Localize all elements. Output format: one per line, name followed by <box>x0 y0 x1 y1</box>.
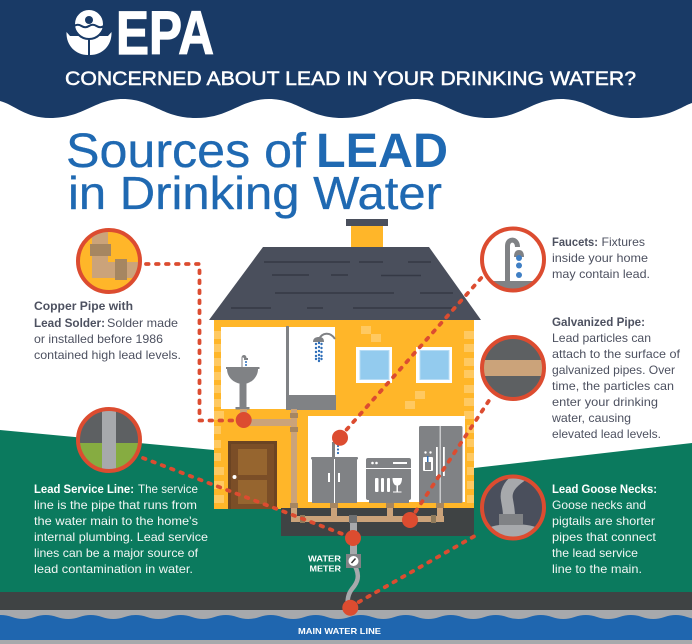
text: lead service line: lines can be a major source of <box>34 546 199 560</box>
underground street and water main <box>0 592 692 644</box>
roof <box>209 247 481 320</box>
kitchen faucet <box>332 442 339 458</box>
chimney <box>346 219 388 248</box>
water meter label: METER <box>310 564 341 574</box>
text: lead goose necks: pipes that connect <box>552 530 657 544</box>
text: lead goose necks: the lead service <box>552 546 638 560</box>
text: lead service line: internal plumbing. Lead service <box>34 530 208 544</box>
bathtub <box>286 395 336 410</box>
text: copper pipe: or installed before 1986 <box>34 332 163 346</box>
callout: copper pipe <box>34 228 181 362</box>
main water line <box>0 615 692 640</box>
windows <box>356 347 452 383</box>
indoor plumbing <box>240 409 444 523</box>
cabinet <box>311 457 358 503</box>
EPA wordmark: EPA <box>116 0 214 67</box>
title: LEAD <box>316 125 448 178</box>
shower <box>313 334 335 362</box>
text: copper pipe: Lead Solder: <box>34 316 105 330</box>
text: lead goose necks: Lead Goose Necks: <box>552 482 657 496</box>
text: copper pipe: contained high lead levels. <box>34 348 181 362</box>
text: lead goose necks <box>552 482 657 576</box>
icon: EPA flower <box>66 9 112 55</box>
text: faucets: Faucets: <box>552 235 598 249</box>
callout: faucets <box>480 227 650 293</box>
text: galvanized pipe: Lead particles can <box>552 331 651 345</box>
text: copper pipe <box>34 299 181 362</box>
foundation <box>281 508 474 536</box>
dishwasher <box>366 458 411 503</box>
door <box>228 441 277 509</box>
icon: goose neck <box>480 474 546 540</box>
green ground <box>0 430 692 592</box>
text: copper pipe: Solder made <box>107 316 178 330</box>
text: galvanized pipe: time, the particles can <box>552 379 674 393</box>
icon: galvanized pipe <box>480 335 546 401</box>
text: lead goose necks: Goose necks and <box>552 498 646 512</box>
text: galvanized pipe: attach to the surface of <box>552 347 681 361</box>
text: lead service line: the water main to the home's <box>34 514 198 528</box>
text: galvanized pipe: enter your drinking <box>552 395 658 409</box>
callout: lead service line <box>34 407 208 576</box>
title <box>66 125 448 219</box>
title: in Drinking Water <box>68 167 442 219</box>
EPA logo <box>66 0 214 67</box>
header banner <box>0 0 692 118</box>
house wall <box>214 320 474 509</box>
header question: CONCERNED ABOUT LEAD IN YOUR DRINKING WATER? <box>65 68 636 90</box>
icon: copper pipe with solder <box>76 228 142 294</box>
refrigerator <box>419 426 462 503</box>
text: lead service line: Lead Service Line: <box>34 482 134 496</box>
title: Sources of <box>66 125 307 178</box>
icon: faucet <box>480 227 546 293</box>
sink <box>226 355 260 410</box>
goose neck pipe <box>348 566 358 607</box>
water meter label: WATER <box>308 554 341 564</box>
callout: galvanized pipe <box>480 315 681 441</box>
text: lead goose necks: line to the main. <box>552 562 642 576</box>
text: galvanized pipe <box>551 315 681 441</box>
text: faucets: inside your home <box>552 251 648 265</box>
text: lead service line: lead contamination in water. <box>34 562 193 576</box>
callout: lead goose necks <box>477 474 657 576</box>
text: lead service line: The service <box>138 482 198 496</box>
water meter label <box>308 554 341 574</box>
dotted connector lines <box>143 264 492 607</box>
bathroom <box>221 326 336 410</box>
text: faucets: Fixtures <box>602 235 645 249</box>
water meter <box>346 554 361 568</box>
text: faucets <box>552 235 650 281</box>
kitchen <box>308 416 465 503</box>
wall bricks <box>214 326 474 503</box>
text: galvanized pipe: water, causing <box>551 411 631 425</box>
text: galvanized pipe: elevated lead levels. <box>552 427 661 441</box>
text: galvanized pipe: galvanized pipes. Over <box>552 363 675 377</box>
text: faucets: may contain lead. <box>552 267 650 281</box>
text: lead service line <box>34 482 208 576</box>
text: galvanized pipe: Galvanized Pipe: <box>552 315 645 329</box>
main water line label: MAIN WATER LINE <box>298 626 381 636</box>
house <box>209 219 481 607</box>
text: lead service line: line is the pipe that runs from <box>34 498 197 512</box>
service pipe and water meter <box>308 515 361 607</box>
lead source markers <box>236 412 418 616</box>
text: copper pipe: Copper Pipe with <box>34 299 133 313</box>
icon: service line <box>76 407 142 473</box>
text: lead goose necks: pigtails are shorter <box>552 514 655 528</box>
